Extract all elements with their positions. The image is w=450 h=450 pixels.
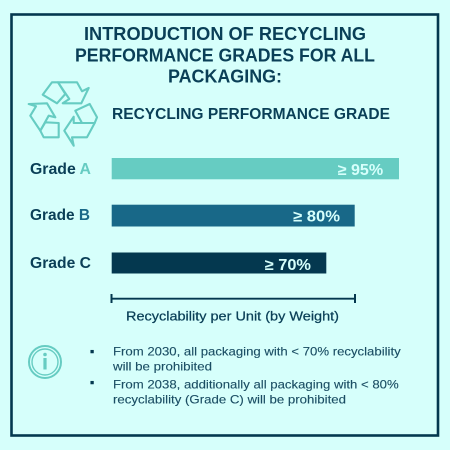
grade C row: [30, 252, 326, 274]
bullet two: [90, 381, 94, 384]
title: [75, 23, 375, 87]
grade C label: Grade C: [30, 255, 91, 272]
grade B value: ≥ 80%: [293, 209, 340, 226]
grade A row: [30, 158, 399, 179]
grade B bar: [112, 205, 355, 226]
icon: information: [29, 346, 61, 378]
grade B row: [30, 205, 355, 226]
title: PACKAGING:: [168, 66, 282, 87]
note two: From 2038, additionally all packaging with < 80%: [113, 378, 399, 392]
axis bracket: [112, 294, 355, 303]
note one: From 2030, all packaging with < 70% recyclability: [113, 344, 401, 358]
chart heading: RECYCLING PERFORMANCE GRADE: [112, 106, 390, 123]
grade B label: Grade B: [30, 207, 90, 224]
note two: recyclability (Grade C) will be prohibited: [113, 393, 346, 407]
title: INTRODUCTION OF RECYCLING: [84, 23, 366, 44]
axis label: Recyclability per Unit (by Weight): [126, 309, 339, 324]
grade A bar: [112, 158, 399, 179]
grade A value: ≥ 95%: [338, 162, 383, 179]
title: PERFORMANCE GRADES FOR ALL: [75, 45, 375, 66]
note list: [90, 344, 401, 407]
grade C value: ≥ 70%: [265, 257, 311, 274]
grade A label: Grade A: [30, 161, 91, 178]
icon: recycling symbol: [29, 82, 97, 146]
note two: [113, 378, 399, 407]
note one: will be prohibited: [112, 359, 212, 373]
note one: [112, 344, 401, 373]
grade C bar: [112, 252, 326, 274]
bullet one: [90, 350, 94, 353]
